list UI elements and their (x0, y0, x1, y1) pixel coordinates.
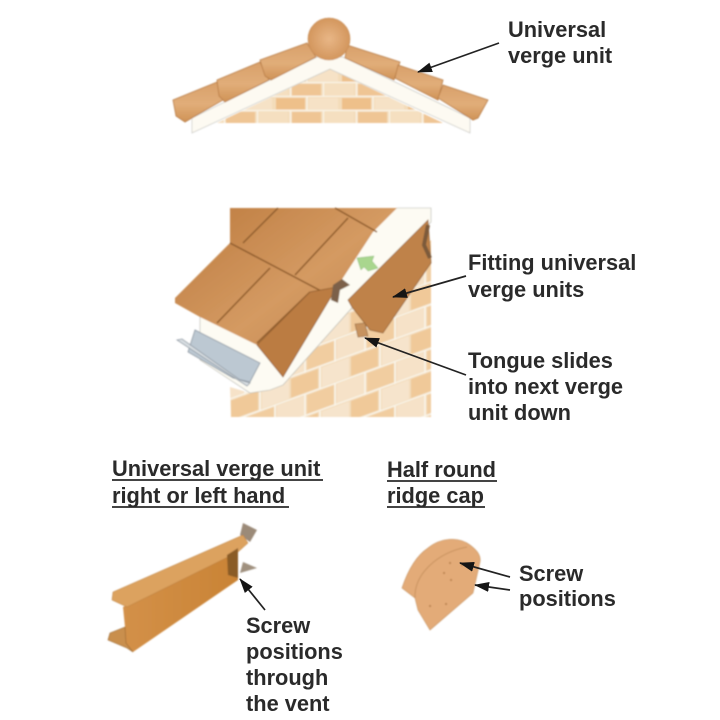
gutter (177, 330, 260, 386)
white bargeboard (192, 57, 470, 133)
label: fitting universal verge units: verge units (468, 277, 584, 302)
illustration: fitting verge units on roof corner (175, 208, 431, 417)
tongue (355, 323, 368, 337)
roof tiles (175, 208, 397, 377)
label: screw positions through the vent: positions (246, 639, 343, 664)
label: universal verge unit: Universal (508, 17, 606, 42)
brick wall (230, 240, 431, 417)
heading: half round ridge cap: ridge cap (387, 483, 484, 508)
screw dots (430, 563, 462, 606)
gable brick wall (217, 69, 443, 123)
bottom flange (108, 627, 133, 652)
label: screw positions: positions (519, 586, 616, 611)
top flange (112, 535, 248, 607)
arrow: screw positions through vent (240, 579, 265, 610)
arrow: universal verge unit (418, 43, 499, 72)
green arrow (357, 256, 378, 271)
vent (227, 548, 238, 578)
arrow: ridge cap upper screw (460, 563, 510, 577)
arrow: fitting verge units (393, 276, 466, 297)
heading: universal verge unit right or left hand: Universal verge unit (112, 456, 320, 481)
illustration: universal verge unit part (108, 523, 257, 652)
label: screw positions through the vent: the vent (246, 691, 330, 716)
vent detail (331, 279, 350, 303)
arrow: ridge cap lower screw (475, 585, 510, 590)
heading: half round ridge cap (387, 457, 497, 508)
label: tongue slides: into next verge (468, 374, 623, 399)
heading: universal verge unit right or left hand: right or left hand (112, 483, 285, 508)
label: screw positions: Screw (519, 561, 583, 586)
end tab (240, 523, 257, 542)
illustration: roof gable with universal verge units (173, 18, 488, 133)
label: universal verge unit: verge unit (508, 43, 612, 68)
illustration: half round ridge cap (402, 539, 480, 630)
arrow: tongue (365, 338, 466, 375)
white bargeboard and eaves (200, 208, 431, 393)
web (123, 548, 238, 652)
installed verge unit (257, 287, 337, 377)
tile joints (217, 208, 377, 343)
heading: universal verge unit right or left hand (112, 456, 323, 508)
label: tongue slides: Tongue slides (468, 348, 613, 373)
label: tongue slides: unit down (468, 400, 571, 425)
loose verge unit (348, 220, 431, 333)
label: fitting universal verge units: Fitting universal (468, 250, 636, 275)
left verge tiles (173, 43, 316, 122)
label: screw positions through the vent: through (246, 665, 328, 690)
ridge ball (308, 18, 350, 60)
right verge tiles (345, 45, 488, 120)
heading: half round ridge cap: Half round (387, 457, 496, 482)
label: screw positions through the vent: Screw (246, 613, 310, 638)
vent on loose unit (424, 225, 430, 258)
